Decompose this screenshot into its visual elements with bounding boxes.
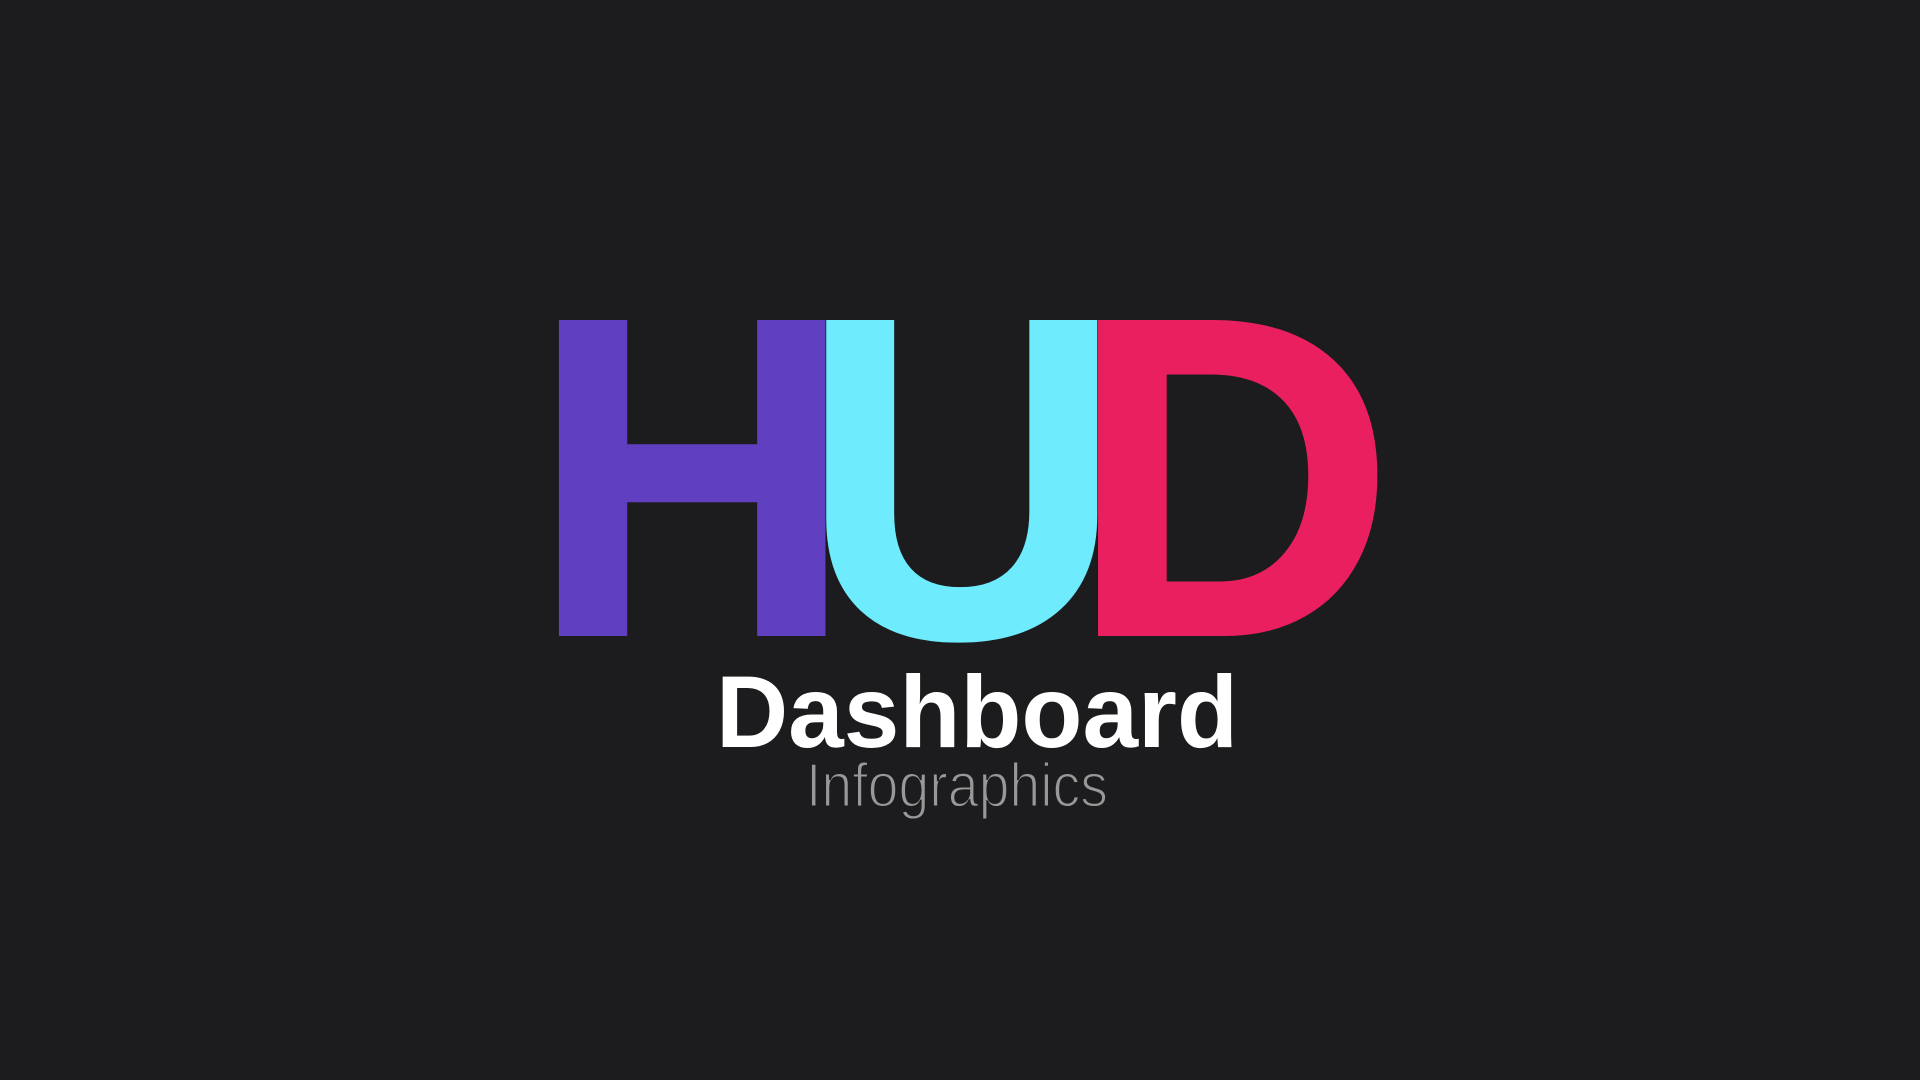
title: HUD — [531, 224, 1394, 733]
letter H: H — [531, 225, 854, 731]
letter U: U — [802, 224, 1122, 733]
letter D: D — [1070, 224, 1394, 730]
caption: Infographics: Infographics — [806, 752, 1108, 820]
subtitle: Dashboard: Dashboard — [716, 655, 1238, 769]
